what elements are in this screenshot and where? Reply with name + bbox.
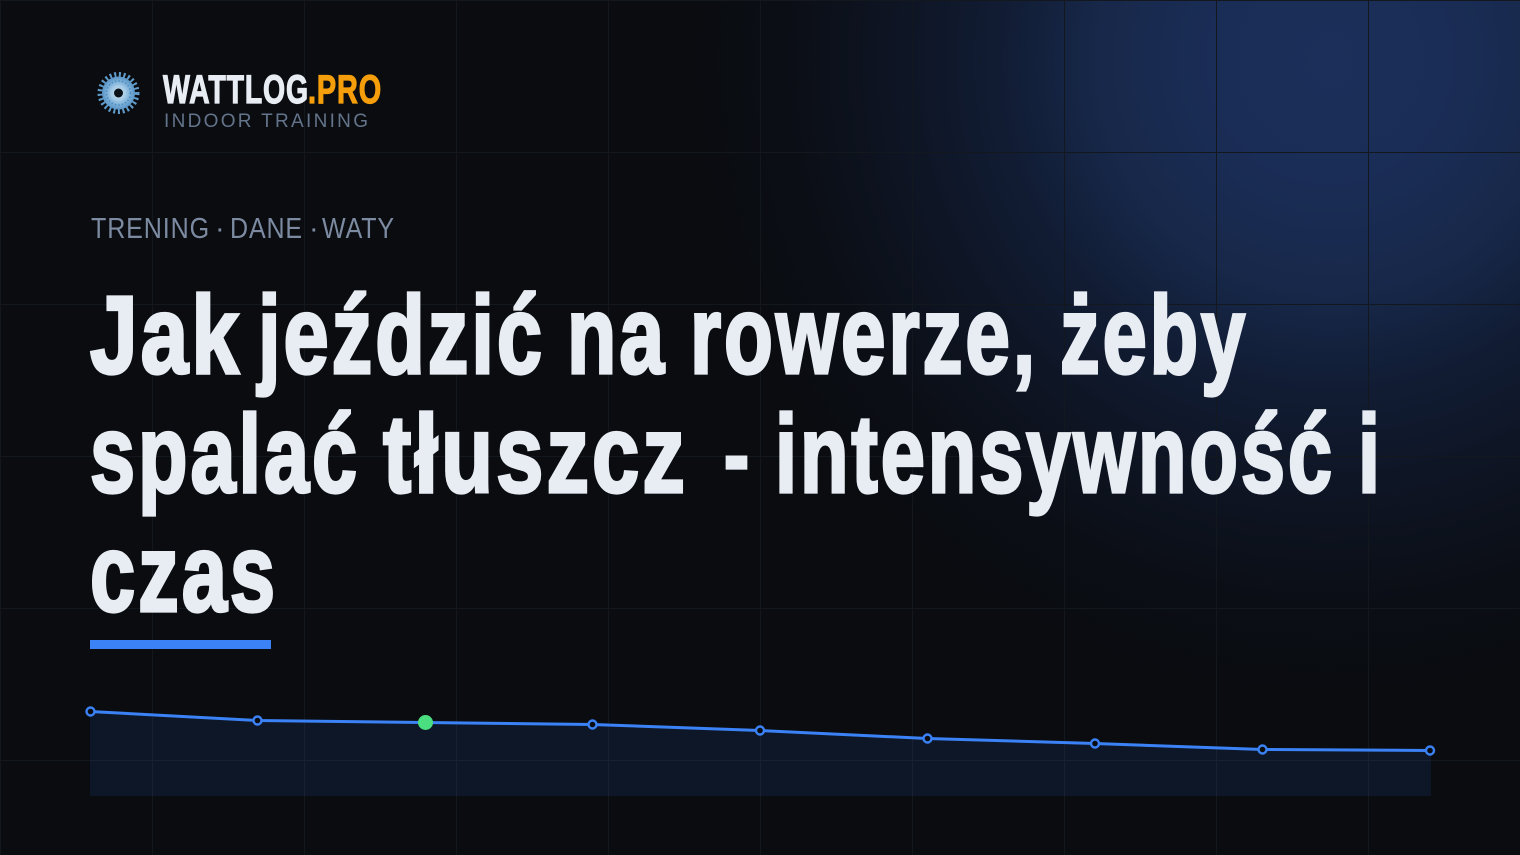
tagline: INDOOR TRAINING	[164, 111, 368, 132]
title: na	[567, 274, 667, 397]
kicker: TRENING	[91, 213, 210, 245]
title	[90, 274, 1380, 635]
title: czas	[90, 512, 278, 635]
brand name: .PRO	[308, 68, 382, 112]
title: rowerze,	[690, 274, 1038, 397]
kicker	[91, 213, 395, 245]
title: Jak	[90, 274, 242, 397]
kicker: DANE	[230, 213, 303, 245]
chart area fill	[90, 712, 1431, 796]
title underline	[90, 640, 271, 649]
title: tłuszcz	[383, 393, 688, 516]
title: –	[725, 393, 748, 516]
line chart	[86, 708, 1434, 796]
title: żeby	[1060, 274, 1248, 397]
data points	[86, 708, 1434, 754]
kicker: ·	[309, 213, 320, 245]
chart line	[90, 712, 1430, 750]
title: spalać	[90, 393, 360, 516]
title: i	[1358, 393, 1380, 516]
icon: cassette gear	[100, 74, 137, 112]
kicker: WATY	[322, 213, 395, 245]
title: jeździć	[257, 274, 545, 397]
logo	[100, 68, 382, 132]
brand name: WATTLOG	[163, 68, 309, 112]
kicker: ·	[215, 213, 226, 245]
highlighted data point	[418, 715, 433, 730]
